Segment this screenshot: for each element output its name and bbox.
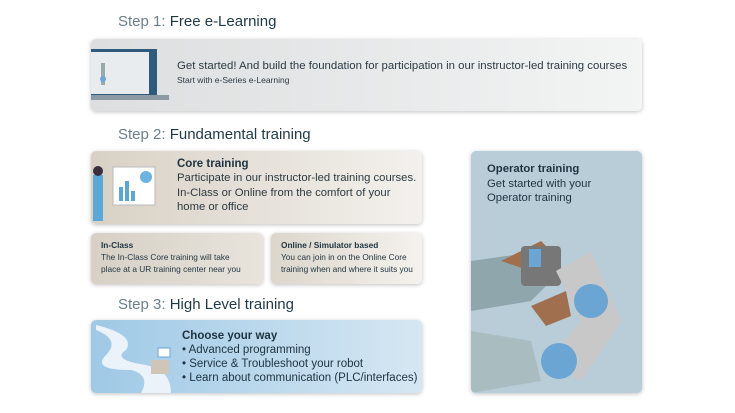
- panel: in-class: The In-Class Core training will take: [101, 252, 230, 262]
- heading: step 1: Step 1: Free e-Learning: [118, 13, 276, 30]
- panel: online: Online / Simulator based: [281, 240, 378, 250]
- text block: [182, 330, 417, 384]
- text block: home or office: [177, 201, 248, 213]
- text block: Core training: [177, 158, 249, 170]
- illustration: road: [96, 325, 171, 393]
- panel: e-learning: [91, 39, 642, 111]
- panel: operator training: Get started with your: [487, 178, 591, 190]
- text block: • Learn about communication (PLC/interfaces): [182, 372, 417, 384]
- text block: Choose your way: [182, 330, 277, 342]
- panel: operator training: [471, 151, 642, 393]
- icon: presenter: [93, 166, 156, 221]
- text block: • Service & Troubleshoot your robot: [182, 358, 363, 370]
- panel: high level: [91, 320, 422, 393]
- text block: Get started! And build the foundation for participation in our instructor-led training courses: [177, 60, 627, 72]
- text block: In-Class or Online from the comfort of your: [177, 186, 390, 198]
- panel: in-class: place at a UR training center near you: [101, 264, 241, 274]
- icon: laptop: [91, 49, 169, 100]
- heading: step 2: Step 2: Fundamental training: [118, 126, 311, 143]
- panel: operator training: Operator training: [487, 192, 572, 204]
- panel: online: training when and where it suits you: [281, 264, 413, 274]
- panel: operator training: Operator training: [487, 163, 579, 175]
- text block: [177, 60, 627, 85]
- panel: in-class: [91, 233, 263, 284]
- panel: online: You can join in on the Online Core: [281, 252, 407, 262]
- illustration: robot arm and hands: [471, 241, 621, 392]
- panel: online: [271, 233, 422, 284]
- text block: [177, 158, 416, 213]
- panel: in-class: In-Class: [101, 240, 133, 250]
- text block: • Advanced programming: [182, 344, 311, 356]
- heading: step 3: Step 3: High Level training: [118, 296, 294, 313]
- text block: Start with e-Series e-Learning: [177, 75, 289, 85]
- text block: Participate in our instructor-led training courses.: [177, 172, 416, 184]
- panel: core training: [91, 151, 422, 224]
